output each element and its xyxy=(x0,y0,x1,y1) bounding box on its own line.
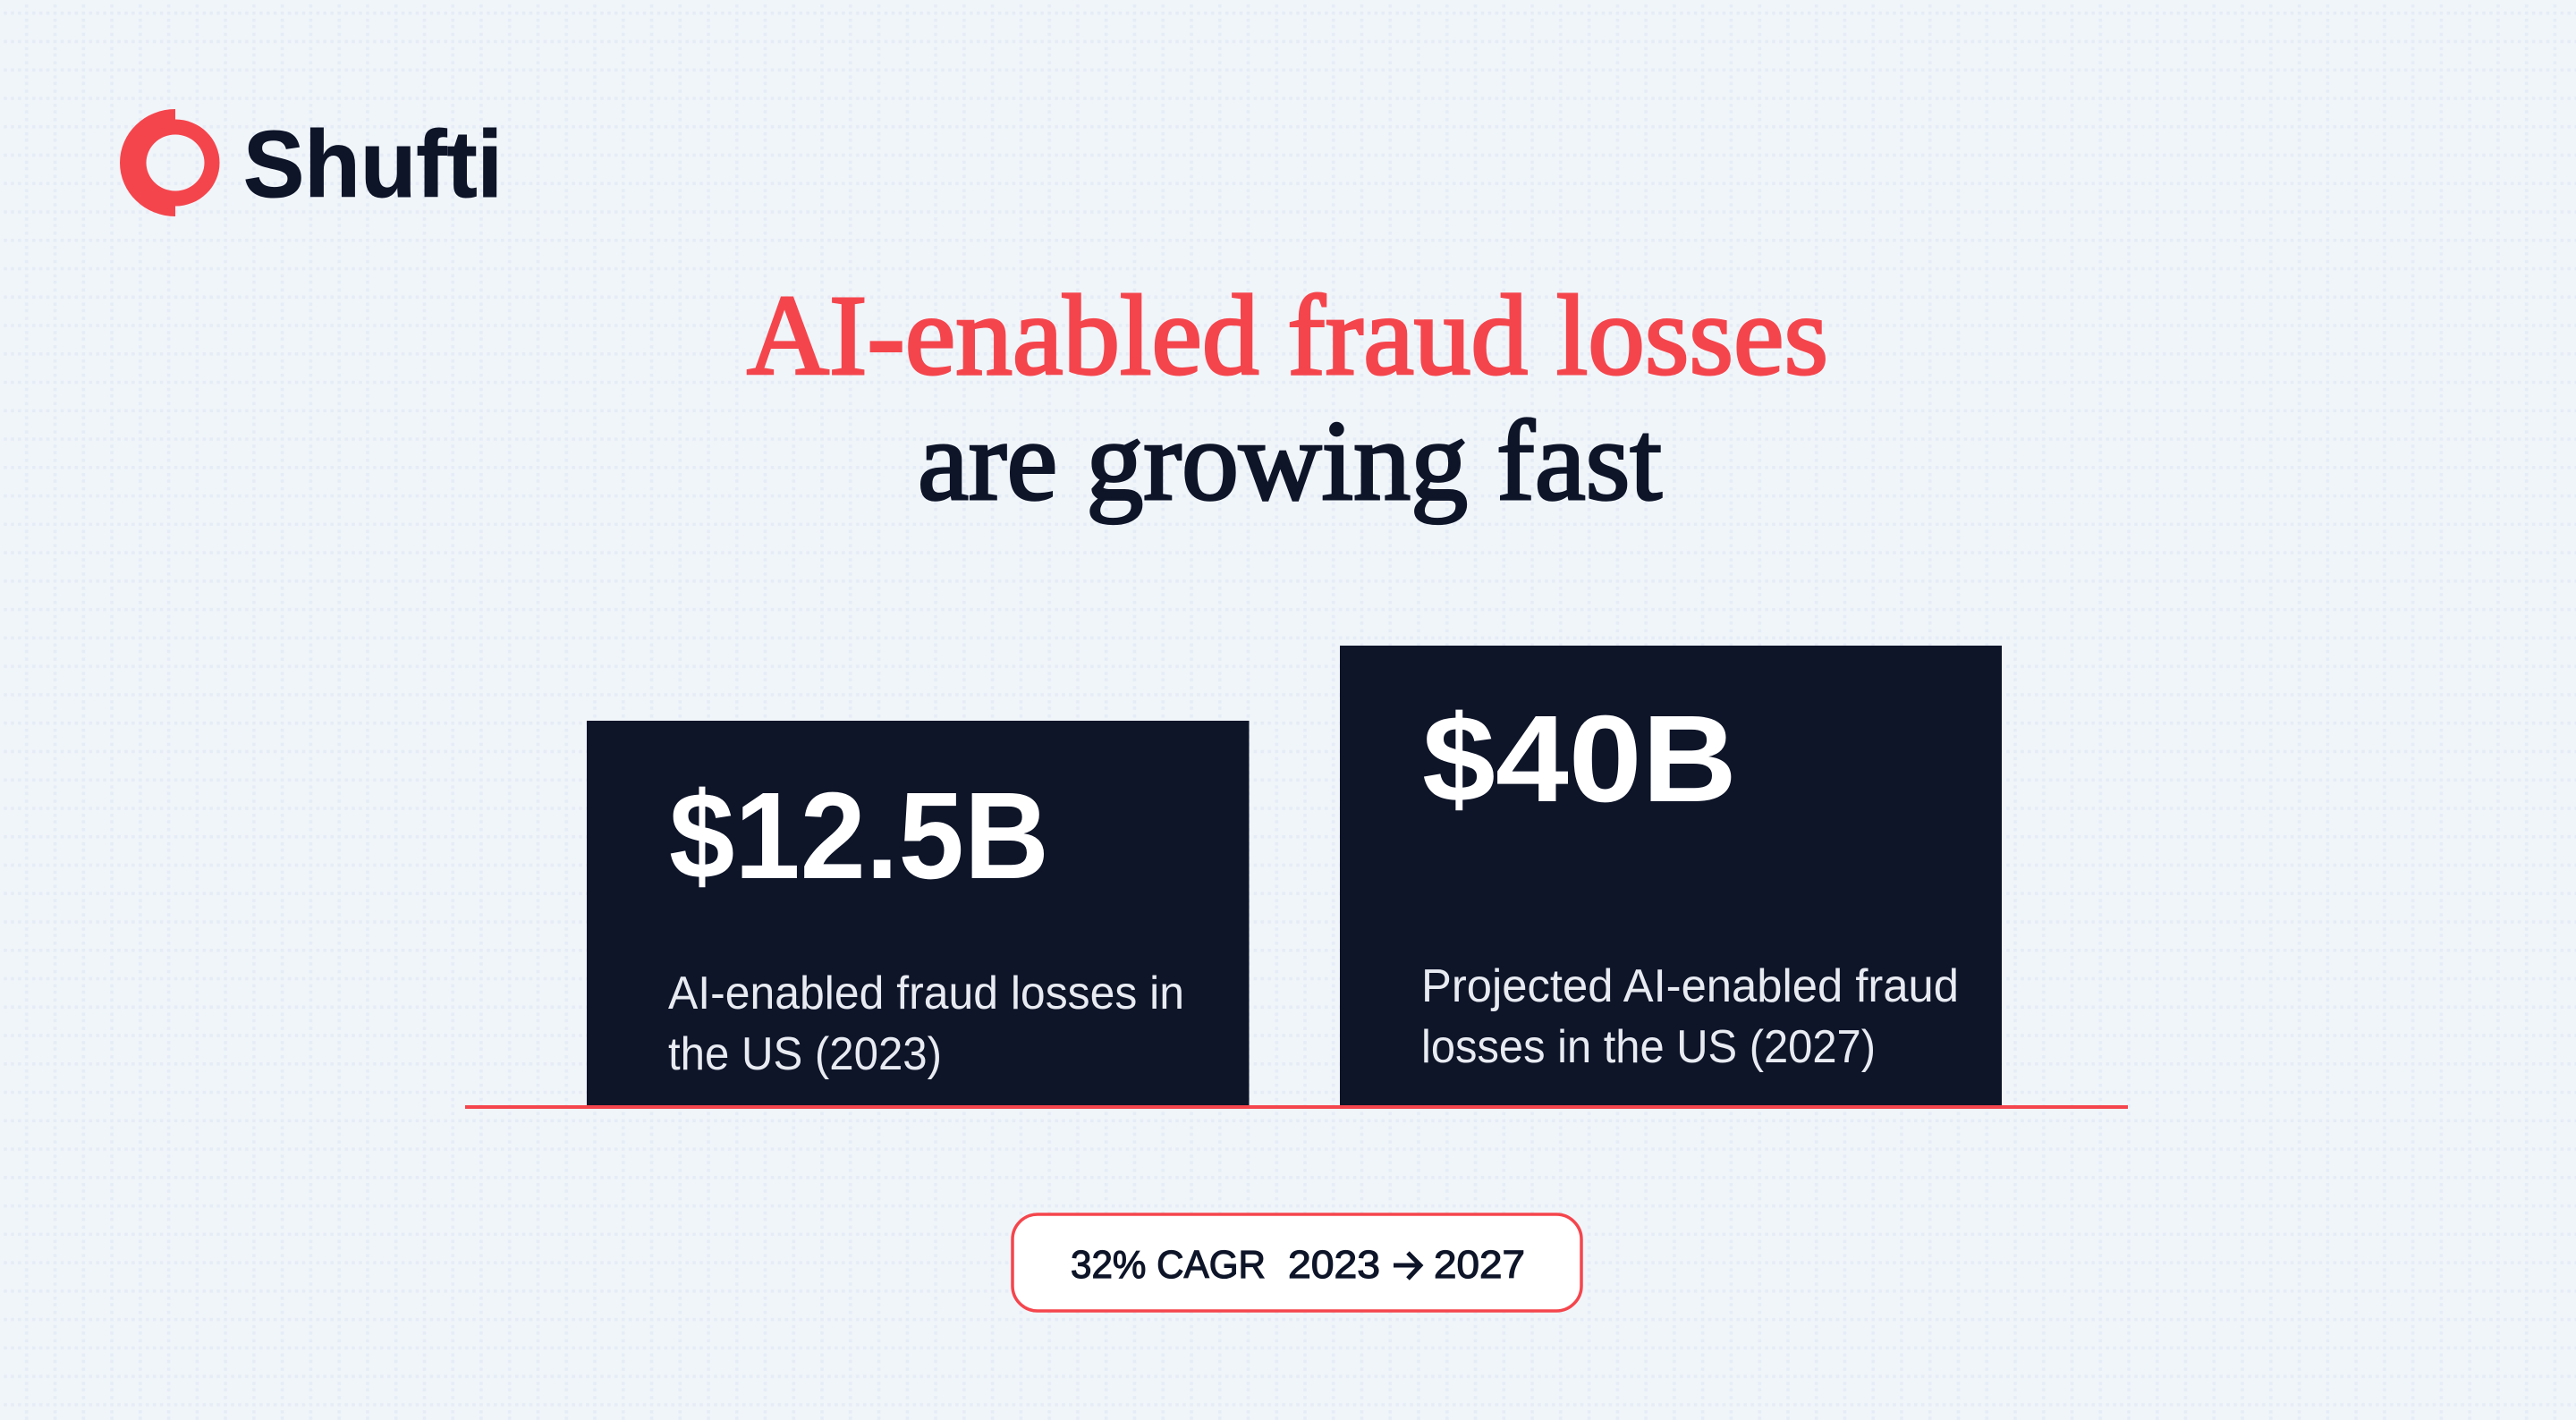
caption: 2027: losses in the US (2027) xyxy=(1421,1021,1876,1073)
caption: 2023: the US (2023) xyxy=(668,1028,942,1080)
icon: Shufti ring mark xyxy=(120,109,219,216)
callout: CAGR pill: 32% CAGR xyxy=(1071,1243,1266,1287)
logo: Shufti xyxy=(120,109,503,217)
title xyxy=(747,272,1828,524)
wordmark: Shufti xyxy=(243,112,503,217)
callout: CAGR pill: 2023 xyxy=(1288,1243,1380,1287)
panel: 2023 losses xyxy=(587,721,1249,1105)
caption: 2027 xyxy=(1421,960,1959,1073)
caption: 2023: AI-enabled fraud losses in xyxy=(668,968,1184,1019)
arrow xyxy=(1394,1253,1420,1279)
callout: CAGR pill: 2027 xyxy=(1434,1243,1525,1287)
callout: CAGR pill xyxy=(1013,1214,1581,1311)
caption: 2027: Projected AI-enabled fraud xyxy=(1421,960,1959,1012)
caption: 2023 xyxy=(668,968,1184,1080)
stat: $40B: $40B xyxy=(1422,690,1737,828)
title line 2: are growing fast xyxy=(918,397,1662,524)
baseline rule xyxy=(465,1105,2128,1109)
stat: $12.5B: $12.5B xyxy=(669,767,1049,905)
title line 1: AI-enabled fraud losses xyxy=(747,272,1828,399)
panel: 2027 projection xyxy=(1340,646,2002,1105)
